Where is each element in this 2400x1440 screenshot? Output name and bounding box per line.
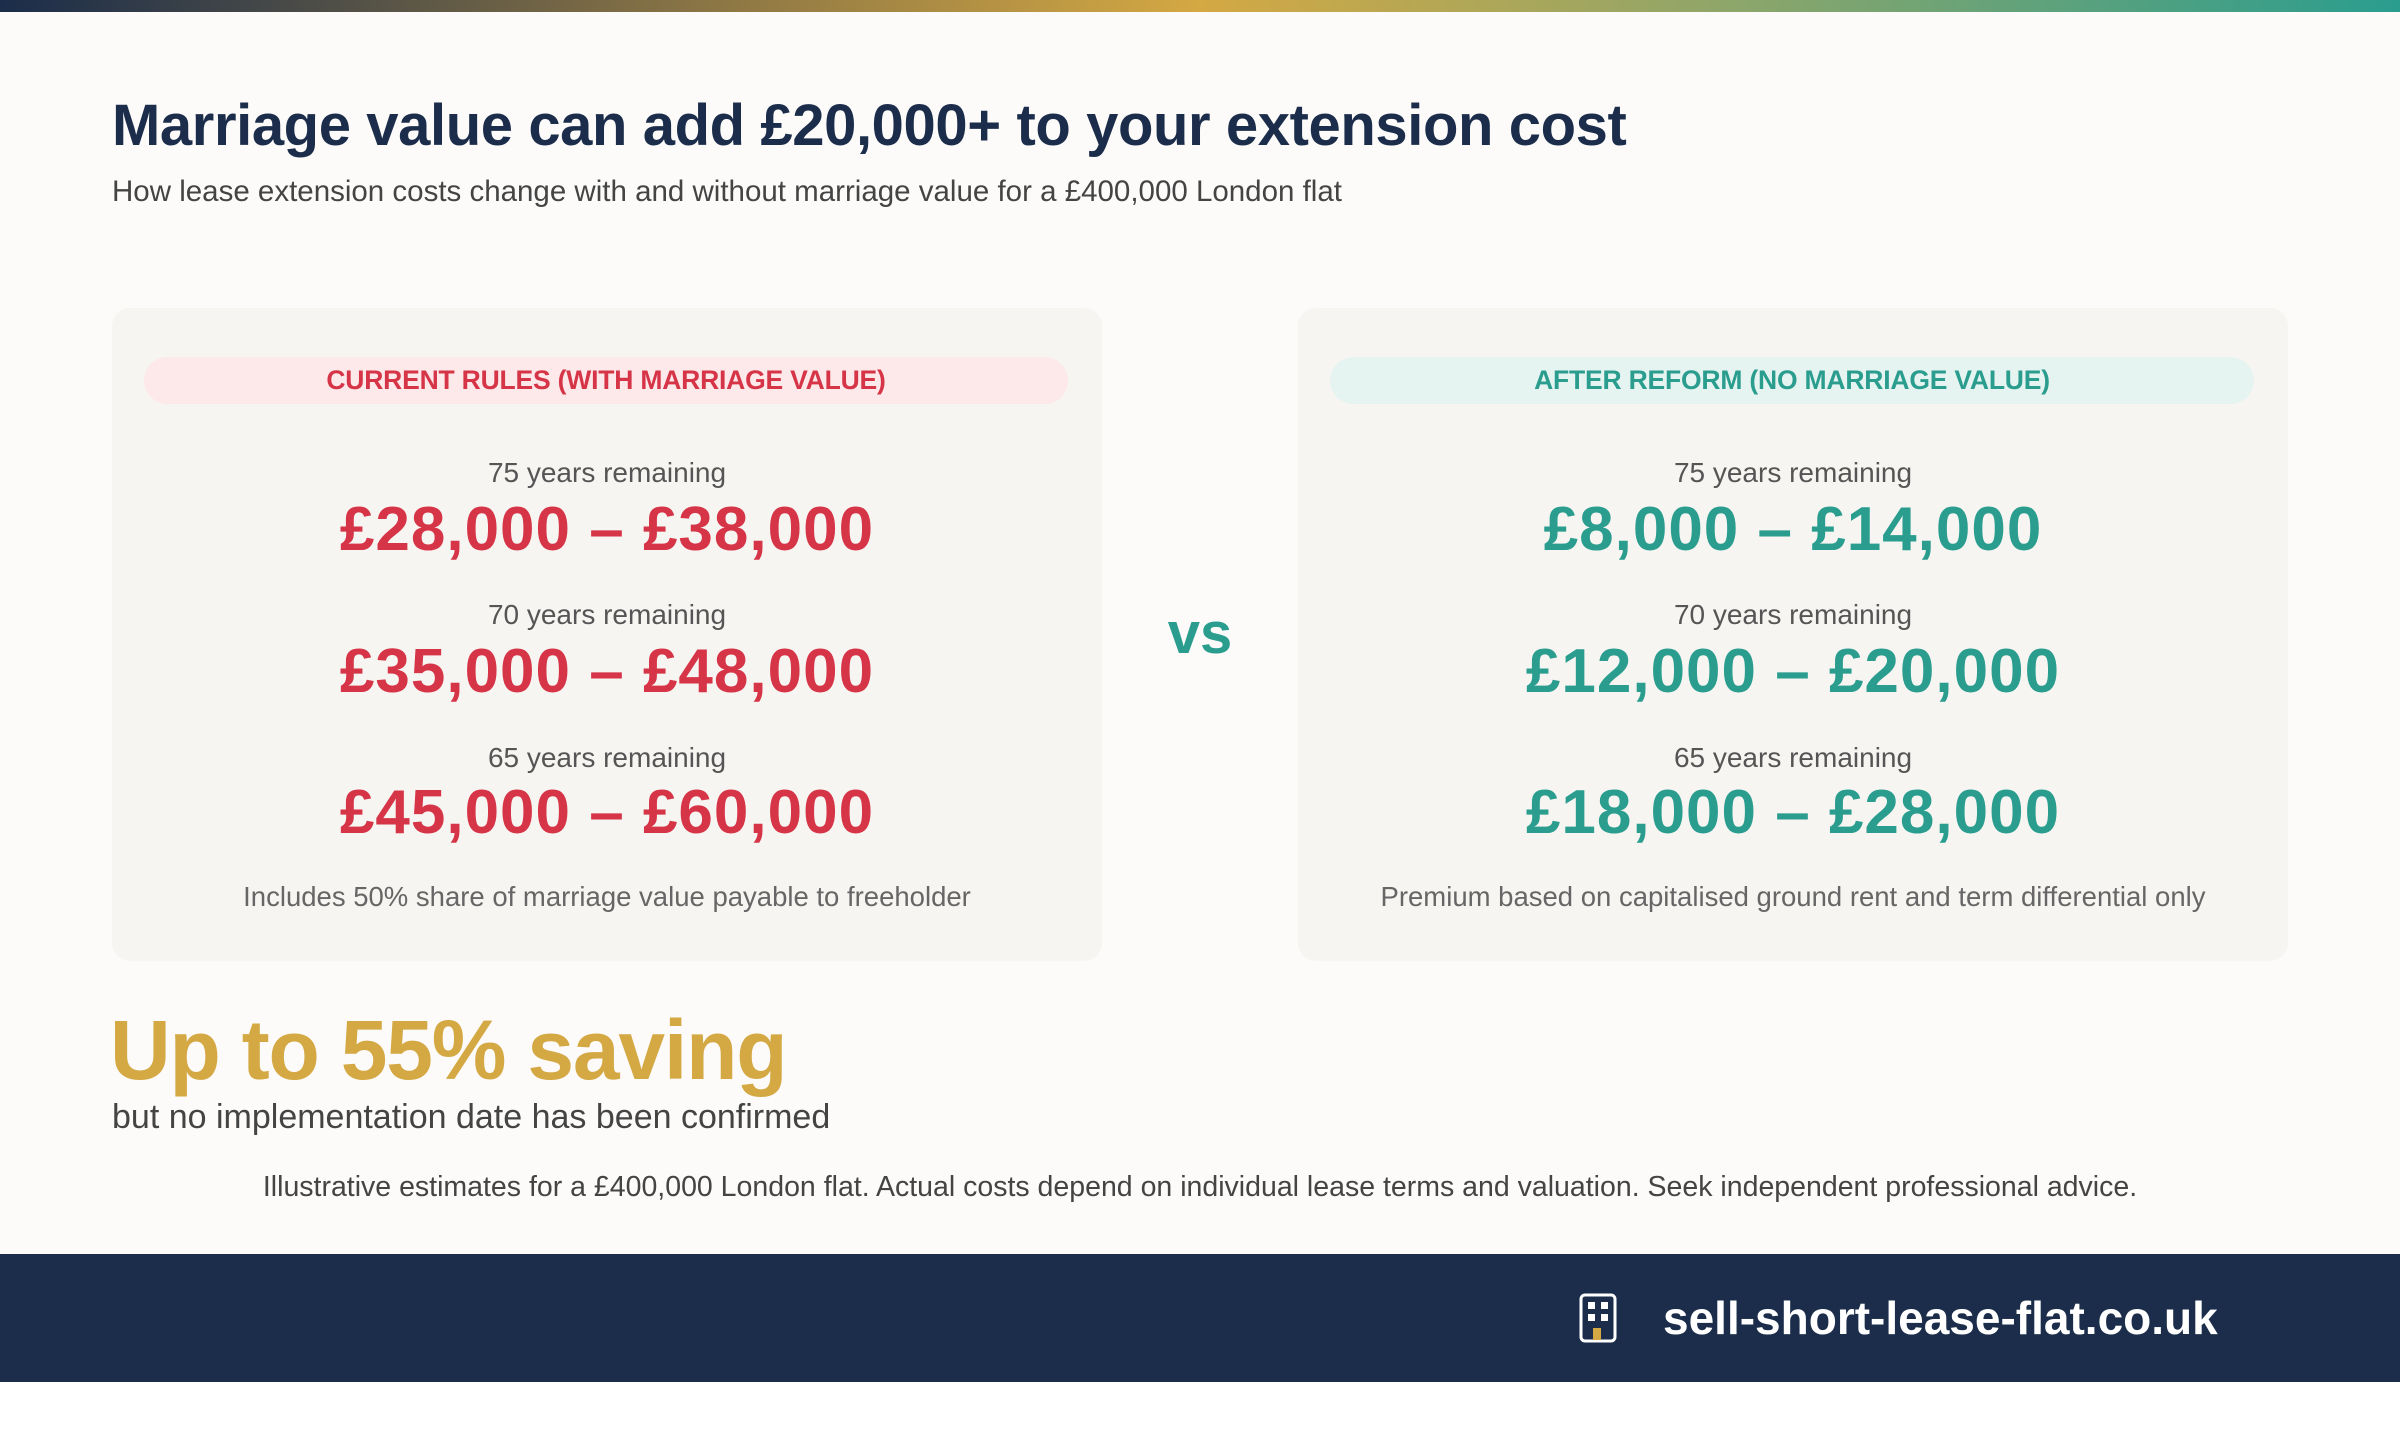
disclaimer: Illustrative estimates for a £400,000 London flat. Actual costs depend on individual lease terms and valuation. Seek independent professional advice. [263,1171,2137,1203]
price 70: £12,000 – £20,000 [1526,637,2060,706]
row 75 years label: 75 years remaining [1674,457,1912,488]
row 75 years label: 75 years remaining [488,457,726,488]
panel: current rules [112,308,1102,961]
title: Marriage value can add £20,000+ to your extension cost [112,93,1626,158]
row 70 years label: 70 years remaining [1674,599,1912,630]
row 65 years label: 65 years remaining [1674,742,1912,773]
row 65 years label: 65 years remaining [488,742,726,773]
pill: after reform heading [1330,357,2254,404]
price 75: £28,000 – £38,000 [340,495,874,564]
saving headline: Up to 55% saving [110,1003,786,1097]
panel: after reform [1298,308,2288,961]
vs label: vs [1168,601,1232,666]
price 65: £18,000 – £28,000 [1526,778,2060,847]
note: Includes 50% share of marriage value payable to freeholder [243,881,971,912]
footer bar [0,1254,2400,1382]
subtitle: How lease extension costs change with and without marriage value for a £400,000 London flat [112,175,1342,208]
pill: after reform heading: AFTER REFORM (NO MARRIAGE VALUE) [1534,365,2050,395]
price 65: £45,000 – £60,000 [340,778,874,847]
pill: current rules heading [144,357,1068,404]
icon: building [1580,1294,1616,1342]
price 70: £35,000 – £48,000 [340,637,874,706]
top gradient bar [0,0,2400,12]
price 75: £8,000 – £14,000 [1544,495,2042,564]
saving subtext: but no implementation date has been confirmed [112,1098,830,1136]
row 70 years label: 70 years remaining [488,599,726,630]
pill: current rules heading: CURRENT RULES (WITH MARRIAGE VALUE) [326,365,886,395]
footer url: sell-short-lease-flat.co.uk [1663,1292,2218,1344]
note: Premium based on capitalised ground rent and term differential only [1381,881,2205,912]
